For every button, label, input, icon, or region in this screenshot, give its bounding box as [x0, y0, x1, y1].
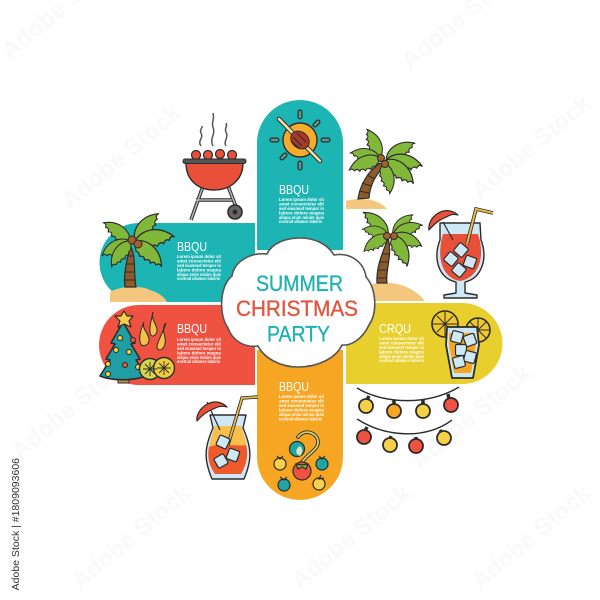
title: SUMMER — [256, 271, 343, 296]
body text: sed eiusmod tempor in — [177, 263, 221, 268]
icon: christmas tree — [100, 311, 146, 383]
body text: aliqua enim minim quis — [177, 272, 221, 277]
heading: BBQU — [279, 379, 309, 394]
body text: sed eiusmod tempor in — [279, 206, 324, 211]
panel: orange — [257, 350, 343, 500]
body text: nostrud ullamco laboris — [177, 359, 220, 364]
body text: labore dolore magna — [379, 350, 425, 354]
body text: aliqua enim minim quis — [279, 215, 325, 220]
body text: amet consectetur elit — [177, 258, 222, 264]
body text: nostrud ullamco laboris — [279, 416, 322, 422]
body text: nostrud ullamco laboris — [379, 358, 424, 363]
icon: orange cocktail — [197, 397, 258, 479]
body text: aliqua enim minim quis — [279, 412, 325, 417]
body text: labore dolore magna — [177, 268, 222, 272]
panel: top teal — [257, 100, 343, 250]
body text: nostrud ullamco laboris — [279, 219, 322, 224]
icon: flames — [140, 312, 166, 350]
heading: CRQU — [379, 321, 411, 336]
body text: amet consectetur elit — [177, 342, 222, 346]
body text: aliqua enim minim quis — [177, 355, 221, 360]
body text: Lorem ipsum dolor sit — [279, 394, 325, 399]
body text: Lorem ipsum dolor sit — [379, 336, 425, 341]
body text: sed eiusmod tempor in — [379, 345, 424, 350]
watermark: Adobe Stock — [467, 479, 597, 595]
title — [236, 271, 358, 346]
body text — [279, 197, 325, 224]
body text — [379, 336, 425, 363]
icon: palm tree lower — [358, 207, 425, 301]
icon: red cocktail — [429, 209, 493, 298]
body text: labore dolore magna — [279, 210, 325, 216]
icon: barbecue grill — [183, 113, 246, 220]
body text: aliqua enim minim quis — [379, 354, 425, 359]
panel: left teal — [99, 209, 255, 302]
icon: string lights — [357, 387, 459, 453]
heading: BBQU — [279, 182, 309, 197]
watermark: Adobe Stock — [407, 359, 537, 475]
heading: BBQU — [177, 321, 207, 336]
body text: Lorem ipsum dolor sit — [177, 337, 222, 342]
watermark: Adobe Stock — [57, 99, 187, 215]
title: PARTY — [267, 322, 330, 346]
body text: Lorem ipsum dolor sit — [279, 197, 325, 202]
body text: nostrud ullamco laboris — [177, 276, 220, 281]
body text — [177, 337, 222, 364]
icon: grill plate — [272, 112, 328, 168]
body text: labore dolore magna — [177, 350, 222, 356]
body text: labore dolore magna — [279, 408, 325, 412]
heading: BBQU — [177, 239, 207, 254]
body text: sed eiusmod tempor in — [279, 403, 324, 408]
icon: ornaments and hook — [274, 432, 328, 491]
center cloud — [222, 238, 375, 367]
body text: amet consectetur elit — [379, 340, 425, 346]
icon: palm tree — [99, 209, 175, 302]
watermark: Adobe Stock — [7, 349, 137, 465]
body text: Lorem ipsum dolor sit — [177, 254, 222, 259]
body text — [177, 254, 222, 281]
body text: sed eiusmod tempor in — [177, 346, 221, 351]
panel: yellow — [346, 303, 502, 384]
icon: citrus slices — [140, 358, 174, 380]
icon: iced drink — [432, 311, 490, 378]
body text: amet consectetur elit — [279, 398, 325, 404]
panel: red — [99, 305, 255, 385]
title: CHRISTMAS — [236, 296, 358, 321]
watermark: Adobe Stock — [287, 479, 417, 595]
stock id caption: Adobe Stock | #1809093606 — [10, 458, 22, 590]
watermark: Adobe Stock — [67, 479, 197, 595]
watermark: Adobe Stock — [467, 89, 597, 205]
body text — [279, 394, 325, 422]
body text: amet consectetur elit — [279, 202, 325, 207]
icon: palm tree upper right — [346, 126, 424, 209]
